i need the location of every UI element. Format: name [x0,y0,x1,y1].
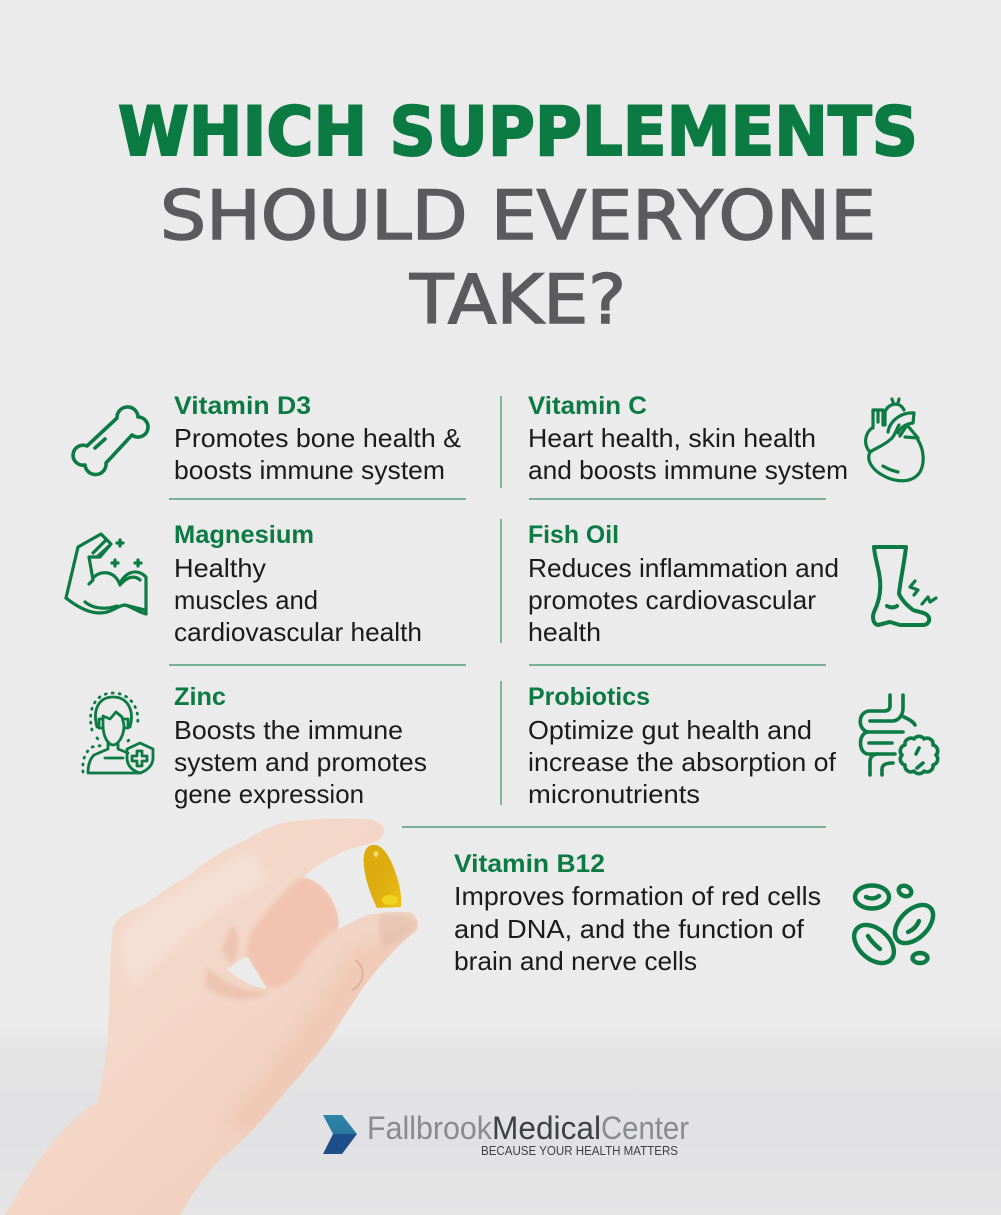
logo [323,1110,689,1158]
block: Vitamin D3: Vitamin D3 [174,392,311,420]
block: Zinc [174,683,427,809]
block: Vitamin C: and boosts immune system [528,455,848,485]
block: Vitamin B12: Improves formation of red cells [454,881,821,911]
block: Vitamin B12 [454,850,821,976]
block: Probiotics: Optimize gut health and [528,715,812,745]
icon: heart [866,399,923,481]
block: Vitamin C: Heart health, skin health [528,423,816,453]
block: Vitamin C [528,392,848,485]
block: Magnesium: muscles and [174,585,318,615]
block: Zinc: system and promotes [174,747,427,777]
block: Vitamin B12: Vitamin B12 [454,850,605,878]
title [118,93,918,340]
block: Zinc: Zinc [174,683,226,711]
block: Vitamin B12: brain and nerve cells [454,946,697,976]
block: Fish Oil: health [528,617,601,647]
icon: muscle arm [66,534,146,614]
logo: Fallbrook [367,1110,493,1146]
block: Zinc: gene expression [174,779,364,809]
block: Magnesium: cardiovascular health [174,617,422,647]
icon: intestine with bacteria [860,695,938,775]
block: Vitamin D3 [174,392,461,485]
icon: person with shield [83,693,153,773]
block: Fish Oil: promotes cardiovascular [528,585,816,615]
block: Probiotics [528,683,837,809]
icon: bone [73,407,148,475]
logo mark [323,1115,357,1154]
block: Probiotics: Probiotics [528,683,650,711]
photo: hand holding capsule [5,819,420,1215]
title: TAKE? [409,261,626,340]
block: Magnesium [174,521,422,647]
block: Zinc: Boosts the immune [174,715,403,745]
block: Vitamin C: Vitamin C [528,392,647,420]
block: Vitamin B12: and DNA, and the function of [454,914,805,944]
block: Fish Oil: Reduces inflammation and [528,553,839,583]
title: WHICH SUPPLEMENTS [118,93,918,172]
capsule [364,845,401,908]
block: Probiotics: increase the absorption of [528,747,837,777]
icon: red blood cells [847,884,940,971]
block: Vitamin D3: boosts immune system [174,455,445,485]
block: Probiotics: micronutrients [528,779,700,809]
block: Fish Oil [528,521,839,647]
logo: Medical [492,1110,601,1146]
hand shading [120,819,420,1135]
block: Magnesium: Healthy [174,553,266,583]
block: Magnesium: Magnesium [174,521,314,549]
block: Vitamin D3: Promotes bone health & [174,423,461,453]
title: SHOULD EVERYONE [160,177,876,256]
logo: Center [601,1110,689,1146]
block: Fish Oil: Fish Oil [528,521,619,549]
icon: foot [873,547,936,625]
logo: BECAUSE YOUR HEALTH MATTERS [481,1143,678,1158]
